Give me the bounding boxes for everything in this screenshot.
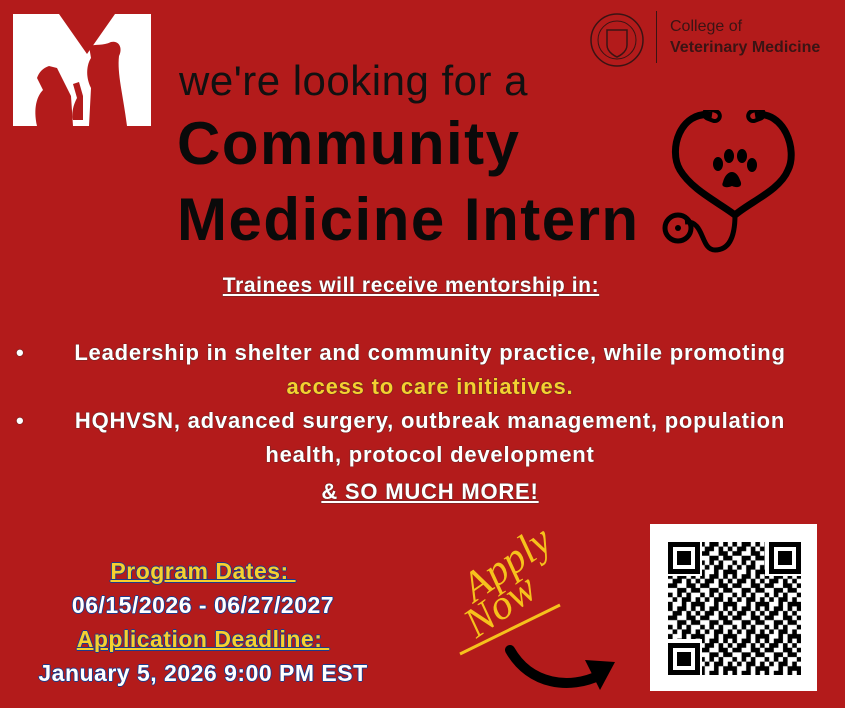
subtitle: we're looking for a xyxy=(179,57,528,104)
bullet list: health, protocol development xyxy=(265,442,595,467)
apply now xyxy=(454,517,561,656)
program dates block: Application Deadline: xyxy=(77,626,322,652)
program dates block: January 5, 2026 9:00 PM EST xyxy=(38,660,368,686)
logo: M with animals xyxy=(13,14,151,126)
logo: Cornell College of Veterinary Medicine: Veterinary Medicine xyxy=(670,39,820,56)
bullet list: Leadership in shelter and community practice, while promoting xyxy=(74,340,786,365)
bullet list: & SO MUCH MORE! xyxy=(321,479,539,504)
program dates block: Program Dates: xyxy=(110,558,289,584)
apply now: Now xyxy=(456,565,545,647)
bullet list: HQHVSN, advanced surgery, outbreak management, population xyxy=(75,408,785,433)
icon: stethoscope with paw xyxy=(662,110,795,252)
bullet list: access to care initiatives. xyxy=(286,374,573,399)
bullet list: • xyxy=(16,408,25,433)
title xyxy=(177,110,640,253)
title: Community xyxy=(177,110,520,177)
bullet list xyxy=(16,340,786,504)
apply now: Apply xyxy=(454,517,560,611)
logo: Cornell College of Veterinary Medicine xyxy=(590,11,820,67)
arrow xyxy=(505,645,615,690)
program dates block: 06/15/2026 - 06/27/2027 xyxy=(72,592,334,618)
QR code xyxy=(650,524,817,691)
program dates block xyxy=(38,558,368,687)
bullet list: • xyxy=(16,340,25,365)
title: Medicine Intern xyxy=(177,186,640,253)
heading: mentorship: Trainees will receive mentorship in: xyxy=(223,274,599,297)
logo: Cornell College of Veterinary Medicine: College of xyxy=(670,18,742,35)
